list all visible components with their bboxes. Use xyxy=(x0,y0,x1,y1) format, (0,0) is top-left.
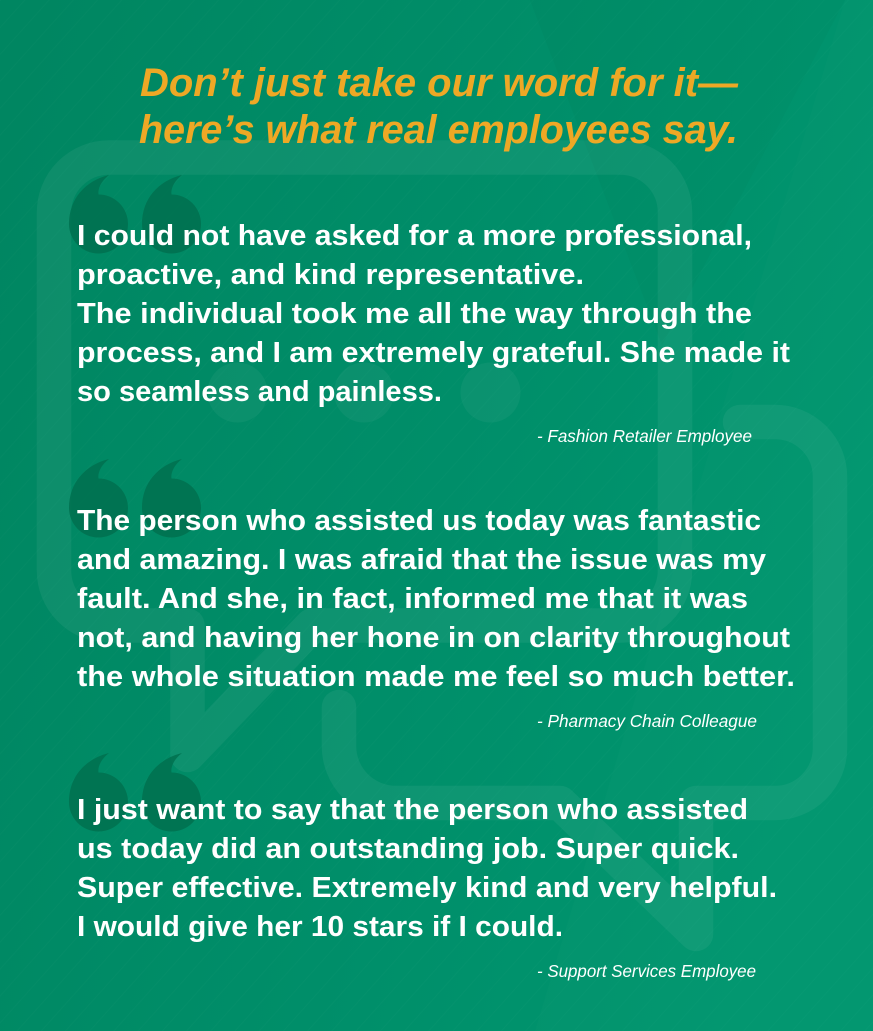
quote text 2 xyxy=(77,505,795,693)
attribution 2: - Pharmacy Chain Colleague xyxy=(537,711,757,731)
attribution 3: - Support Services Employee xyxy=(537,961,756,981)
quote text 2: and amazing. I was afraid that the issue was my xyxy=(77,544,766,576)
quote text 3: Super effective. Extremely kind and very helpful. xyxy=(77,872,777,904)
quote text 3: I just want to say that the person who assisted xyxy=(77,794,748,826)
quote text 3: us today did an outstanding job. Super quick. xyxy=(77,833,739,865)
testimonial 2 xyxy=(69,459,795,731)
quote text 1: process, and I am extremely grateful. She made it xyxy=(77,337,790,369)
quote text 2: fault. And she, in fact, informed me that it was xyxy=(77,583,748,615)
quote text 3: I would give her 10 stars if I could. xyxy=(77,911,563,943)
quote text 1: The individual took me all the way through the xyxy=(77,298,752,330)
quote text 1 xyxy=(77,220,790,408)
speech bubble dots xyxy=(208,362,520,422)
quote text 2: the whole situation made me feel so much better. xyxy=(77,661,795,693)
quote text 2: The person who assisted us today was fantastic xyxy=(77,505,761,537)
quote text 2: not, and having her hone in on clarity throughout xyxy=(77,622,790,654)
speech bubble outline: large upper-left xyxy=(54,158,675,755)
quote text 1: I could not have asked for a more professional, xyxy=(77,220,752,252)
title xyxy=(139,61,739,152)
quote text 1: proactive, and kind representative. xyxy=(77,259,584,291)
speech bubble outline: lower-right xyxy=(339,422,830,934)
icon: quotation mark 3 xyxy=(69,753,201,832)
quote text 1: so seamless and painless. xyxy=(77,376,442,408)
quote text 3 xyxy=(77,794,777,943)
icon: quotation mark 2 xyxy=(69,459,201,538)
attribution 1: - Fashion Retailer Employee xyxy=(537,426,752,446)
testimonial 1 xyxy=(69,175,790,446)
title: here’s what real employees say. xyxy=(139,108,738,152)
icon: quotation mark 1 xyxy=(69,175,201,253)
testimonial 3 xyxy=(69,753,777,981)
title: Don’t just take our word for it— xyxy=(140,61,739,105)
